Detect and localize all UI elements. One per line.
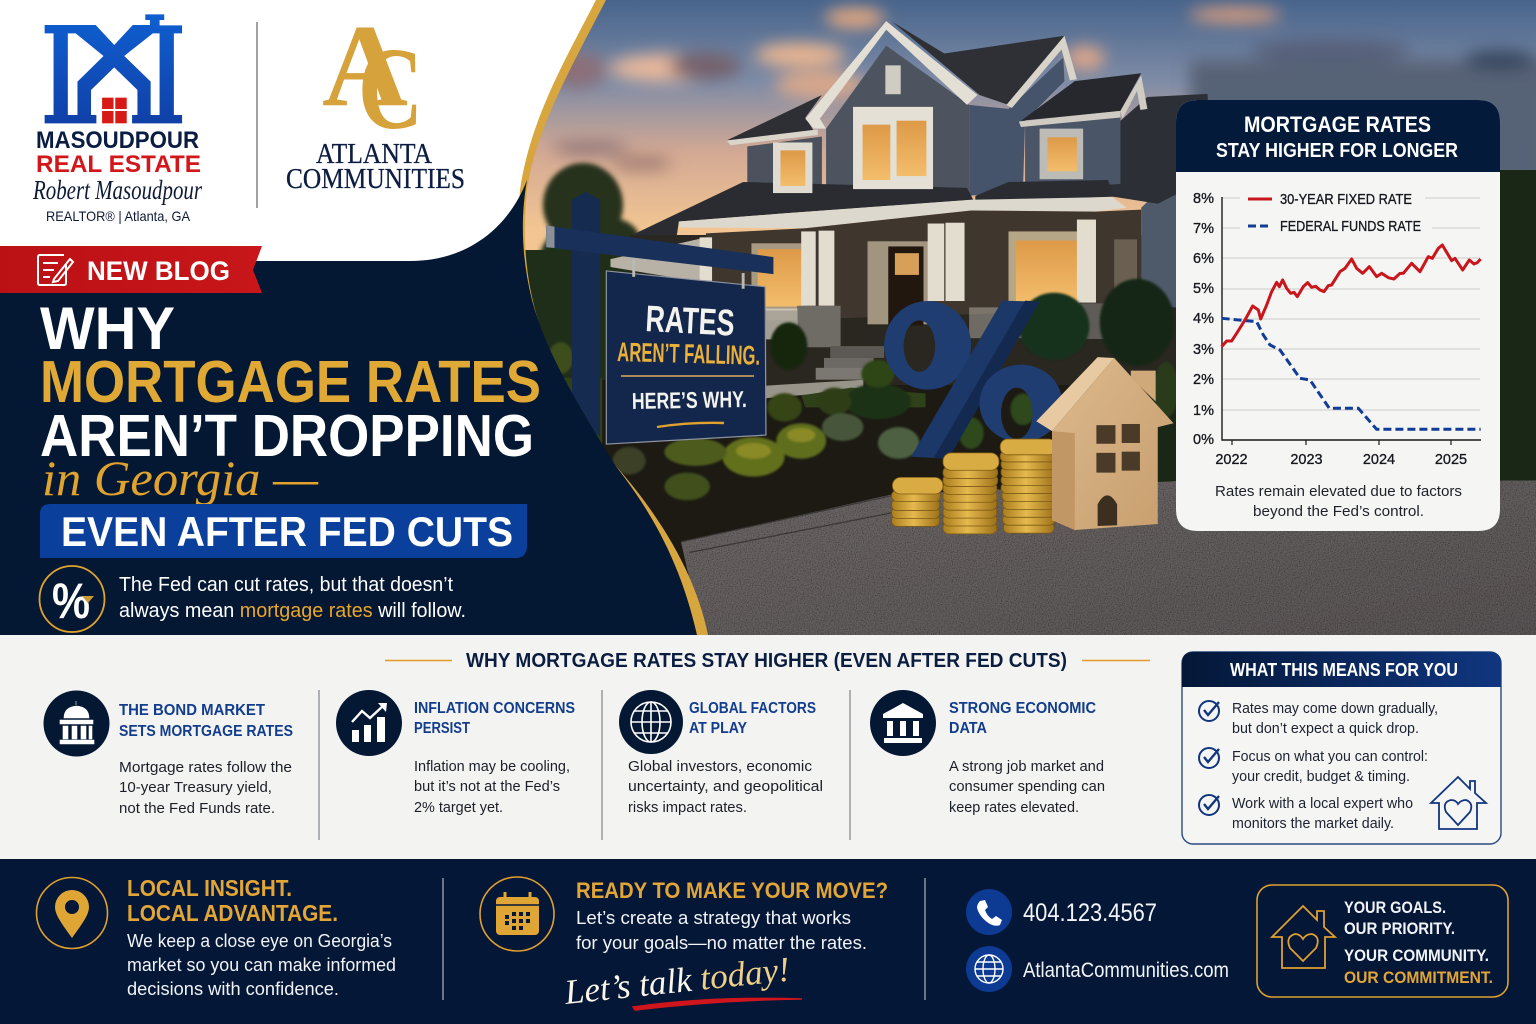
item 2 [1232, 748, 1428, 785]
sign text: AREN’T FALLING. [617, 337, 761, 371]
intro text [119, 574, 466, 622]
sign text [617, 298, 761, 427]
y axis labels: 3% [1193, 342, 1214, 358]
icon: percent badge: % [52, 573, 90, 629]
column text: 2% target yet. [414, 799, 503, 816]
intro text: always mean mortgage rates will follow. [119, 600, 466, 622]
panel: navy headline shape [0, 180, 697, 635]
x axis labels: 2025 [1435, 452, 1467, 468]
icon: bank building [870, 690, 936, 756]
callout text: YOUR COMMUNITY. [1344, 947, 1489, 965]
local insight heading: LOCAL INSIGHT. [127, 875, 292, 901]
icon: phone [966, 889, 1012, 935]
icon: rising bar chart [336, 690, 402, 756]
panel: what this means for you [1182, 652, 1501, 844]
column heading [949, 700, 1096, 737]
column heading: AT PLAY [689, 720, 747, 737]
far right wing [1141, 194, 1176, 308]
lawn and garden ground [602, 380, 1150, 635]
sign text: RATES [645, 298, 736, 344]
column text: 10-year Treasury yield, [119, 779, 272, 796]
x axis labels: 2023 [1290, 452, 1323, 468]
logo: Atlanta Communities [286, 0, 465, 195]
panel: white logo area [0, 0, 600, 261]
gable trim [805, 21, 977, 129]
icon: house with heart [1272, 906, 1335, 968]
ready to move text: for your goals—no matter the rates. [576, 933, 867, 953]
company wordmark: COMMUNITIES [286, 163, 465, 195]
column text: uncertainty, and geopolitical [628, 778, 823, 795]
shrubs [548, 279, 1178, 500]
icon: calendar [480, 877, 554, 951]
porch roof band [679, 197, 1127, 228]
y axis labels: 7% [1193, 221, 1214, 237]
blue banner: even after fed cuts: EVEN AFTER FED CUTS [61, 508, 513, 555]
upper siding [747, 136, 822, 184]
new blog ribbon [0, 246, 262, 293]
sunset clouds [550, 0, 1536, 178]
callout text [1344, 899, 1493, 987]
callout text: YOUR GOALS. [1344, 899, 1446, 917]
column: economic data [870, 690, 1105, 816]
y axis labels: 0% [1193, 432, 1214, 448]
local insight text: decisions with confidence. [127, 979, 339, 999]
house, drawn in zoom-crop coordinates [546, 21, 1536, 651]
icon: location pin [36, 878, 108, 948]
icon: globe [619, 690, 683, 754]
monogram AC: C [358, 23, 423, 154]
local insight heading [127, 875, 338, 926]
y axis labels: 1% [1193, 403, 1214, 419]
porch columns [700, 220, 1096, 306]
monogram AC: A [322, 0, 408, 131]
item 2: Focus on what you can control: [1232, 748, 1428, 765]
y axis labels: 2% [1193, 372, 1214, 388]
roofs [727, 95, 822, 140]
icon: check 2 [1199, 748, 1219, 768]
realtor line: REALTOR® | Atlanta, GA [46, 208, 191, 224]
headline: MORTGAGE RATES [40, 349, 541, 415]
column heading: PERSIST [414, 720, 470, 737]
column text: Inflation may be cooling, [414, 758, 570, 775]
ready to move text [576, 908, 867, 953]
card heading: WHAT THIS MEANS FOR YOU [1230, 660, 1458, 680]
item 1 [1232, 700, 1438, 737]
icon: M house mark [45, 14, 182, 123]
column heading: DATA [949, 720, 987, 737]
item 3: monitors the market daily. [1232, 815, 1394, 832]
item 2: your credit, budget & timing. [1232, 768, 1410, 785]
background trees [536, 160, 642, 250]
chart legend [1248, 192, 1421, 235]
panel: hero photo of house at sunset [500, 0, 1536, 651]
column text: A strong job market and [949, 758, 1104, 775]
y axis labels: 6% [1193, 251, 1214, 267]
item 3: Work with a local expert who [1232, 795, 1413, 812]
ready to move text: Let’s create a strategy that works [576, 908, 851, 928]
company subtitle: REAL ESTATE [36, 151, 201, 178]
sign text: HERE’S WHY. [632, 386, 747, 414]
chart caption: Rates remain elevated due to factors [1215, 483, 1462, 500]
item 1: Rates may come down gradually, [1232, 700, 1438, 717]
column heading [414, 700, 575, 737]
for-sale style sign post [546, 192, 773, 444]
item 1: but don’t expect a quick drop. [1232, 720, 1419, 737]
line: 30-year fixed rate [1222, 245, 1481, 347]
chart caption: beyond the Fed’s control. [1253, 503, 1424, 520]
local insight text [127, 931, 396, 999]
ready to move heading: READY TO MAKE YOUR MOVE? [576, 878, 888, 903]
y axis labels: 8% [1193, 191, 1214, 207]
chart title [1216, 112, 1458, 162]
icon: check 1 [1199, 701, 1219, 721]
column: global factors [619, 690, 823, 816]
panel: why rates stay higher band [0, 635, 1536, 860]
y axis labels: 4% [1193, 311, 1214, 327]
column heading: THE BOND MARKET [119, 702, 265, 719]
chart title: MORTGAGE RATES [1244, 112, 1431, 137]
chart caption [1215, 483, 1462, 520]
phone number: 404.123.4567 [1023, 899, 1157, 927]
red brush underline [633, 998, 802, 1010]
stamped concrete driveway [681, 481, 1536, 651]
x axis labels: 2022 [1215, 452, 1248, 468]
column heading [119, 702, 293, 740]
icon: note and pencil [38, 255, 73, 285]
column heading: GLOBAL FACTORS [689, 700, 816, 717]
callout text: OUR PRIORITY. [1344, 920, 1455, 938]
chart legend: FEDERAL FUNDS RATE [1280, 219, 1421, 235]
let's talk today script: Let’s talk today! [562, 950, 792, 1012]
x axis labels: 2024 [1363, 452, 1395, 468]
section heading: WHY MORTGAGE RATES STAY HIGHER (EVEN AFTER FED CUTS) [466, 650, 1067, 672]
callout: goals and commitment [1257, 885, 1508, 997]
column: bond market [44, 690, 293, 817]
stone bases and rails [797, 306, 841, 347]
subhead: in Georgia: in Georgia — [42, 450, 319, 506]
column heading: INFLATION CONCERNS [414, 700, 575, 717]
headline: AREN’T DROPPING [40, 403, 534, 469]
column text: consumer spending can [949, 778, 1105, 795]
column: inflation [336, 690, 575, 816]
column text: risks impact rates. [628, 799, 747, 816]
headline [40, 295, 541, 469]
local insight heading: LOCAL ADVANTAGE. [127, 900, 338, 926]
company wordmark [286, 138, 465, 195]
local insight text: market so you can make informed [127, 955, 396, 975]
column text [119, 759, 292, 817]
callout text: OUR COMMITMENT. [1344, 969, 1493, 987]
column text [628, 758, 823, 816]
x axis labels [1215, 452, 1467, 468]
column heading: SETS MORTGAGE RATES [119, 723, 293, 740]
gold swoosh bottom [615, 465, 708, 635]
column heading: STRONG ECONOMIC [949, 700, 1096, 717]
icon: capitol dome [44, 690, 110, 756]
porch interior [706, 210, 1141, 322]
signature: Robert Masoudpour [32, 175, 202, 205]
line: federal funds rate [1222, 318, 1481, 429]
y axis labels: 5% [1193, 281, 1214, 297]
icon: gold coin stacks [892, 439, 1056, 534]
icon: check 3 [1199, 795, 1219, 815]
website: AtlantaCommunities.com [1023, 959, 1229, 982]
column text: but it’s not at the Fed’s [414, 778, 560, 795]
item 3 [1232, 795, 1413, 832]
column text: Mortgage rates follow the [119, 759, 292, 776]
chart legend: 30-YEAR FIXED RATE [1280, 192, 1412, 208]
icon: web globe [966, 946, 1012, 992]
intro text: The Fed can cut rates, but that doesn’t [119, 574, 453, 596]
icon: percent badge [40, 566, 104, 632]
column heading [689, 700, 816, 737]
column text: Global investors, economic [628, 758, 812, 775]
checklist [1199, 700, 1438, 832]
icon: 3D percent sculpture [884, 301, 1062, 459]
logo: Masoudpour Real Estate [32, 14, 202, 224]
icon: house with heart [1431, 777, 1486, 829]
front steps and walkway [830, 346, 884, 358]
column text: keep rates elevated. [949, 799, 1079, 816]
chart title: STAY HIGHER FOR LONGER [1216, 140, 1458, 162]
ribbon label: NEW BLOG [87, 256, 230, 286]
icon: wooden house model [1036, 357, 1174, 530]
column text [949, 758, 1105, 816]
column text: not the Fed Funds rate. [119, 800, 275, 817]
gold swoosh top [518, 0, 606, 320]
local insight text: We keep a close eye on Georgia’s [127, 931, 392, 951]
company name: MASOUDPOUR [36, 127, 199, 154]
column text [414, 758, 570, 816]
headline: WHY [40, 295, 175, 362]
y axis labels [1193, 191, 1214, 448]
upper windows [853, 107, 933, 189]
panel: footer call to action [0, 859, 1536, 1024]
company wordmark: ATLANTA [316, 138, 432, 170]
panel: mortgage rates chart card [1176, 100, 1500, 531]
